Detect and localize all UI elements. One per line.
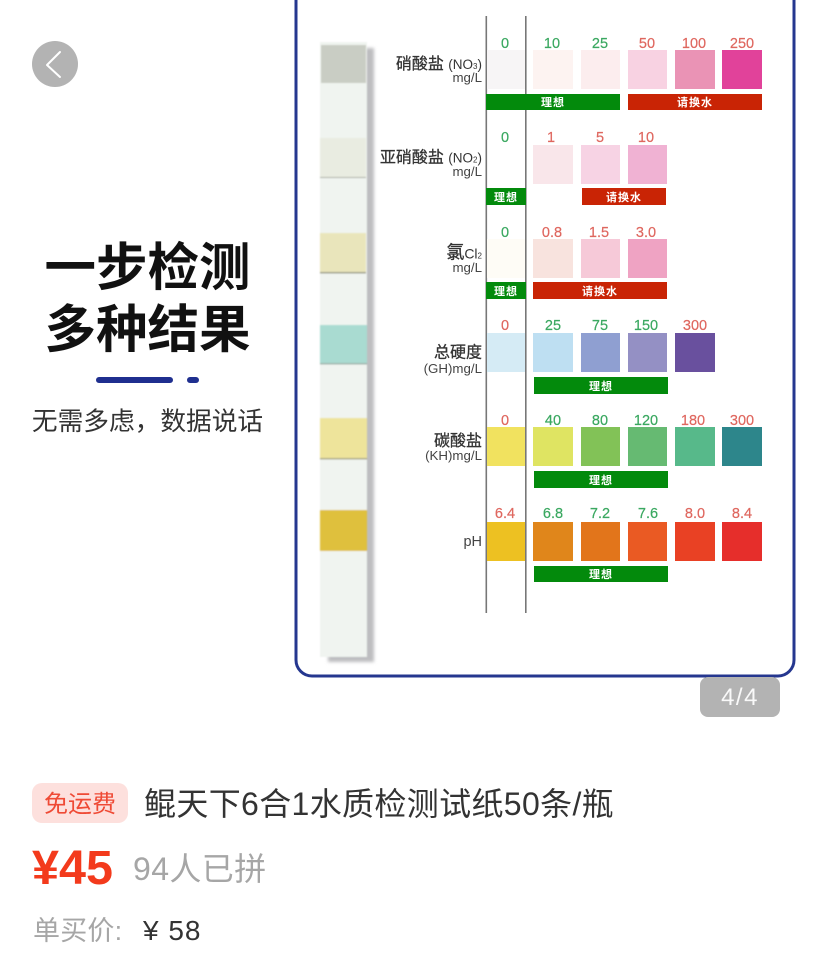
row: chlorine: mg/L [452,260,482,275]
row: pH [463,506,762,582]
single buy price: ¥ 58 [142,915,202,946]
free shipping tag [32,783,128,823]
chart scale lines [486,16,527,613]
row: nitrate: 理想 [541,95,565,109]
row: carbonate: 0 [501,413,509,429]
product title: 鲲天下6合1水质检测试纸50条/瓶 [144,786,614,822]
row: total hardness: 150 [634,318,658,334]
row: nitrite: 亚硝酸盐 (NO2) [380,148,482,166]
row: nitrite: mg/L [452,164,482,179]
row: nitrite: 10 [638,130,654,146]
row: carbonate: 碳酸盐 [434,432,482,450]
row: carbonate: 300 [730,413,754,429]
heading underline [96,377,199,383]
test strip [320,42,374,662]
row: chlorine: 3.0 [636,225,656,241]
row: nitrite [380,130,667,205]
row: pH: 6.8 [543,506,563,522]
heading: one-step test: 多种结果 [44,300,251,358]
row: nitrate: 10 [544,36,560,52]
pagination pill: 4/4 [721,684,759,711]
row: nitrate: 50 [639,36,655,52]
group price: ¥45 [32,841,113,895]
free shipping tag: 免运费 [44,791,116,818]
heading: one-step test [44,238,251,358]
row: chlorine: 请换水 [582,284,618,298]
row: total hardness [424,318,715,394]
row: chlorine: 氯Cl2 [446,242,483,262]
row: pH: 8.4 [732,506,752,522]
row: carbonate: 40 [545,413,561,429]
row: total hardness: 0 [501,318,509,334]
row: nitrate: 25 [592,36,608,52]
row: carbonate: 80 [592,413,608,429]
heading: one-step test: 一步检测 [44,238,251,296]
row: chlorine: 0.8 [542,225,562,241]
row: chlorine: 0 [501,225,509,241]
row: nitrate: 请换水 [677,95,713,109]
row: nitrate: mg/L [452,70,482,85]
row: nitrate: 100 [682,36,706,52]
row: nitrite: 1 [547,130,555,146]
row: total hardness: (GH)mg/L [424,361,482,376]
row: chlorine: 理想 [494,284,518,298]
row: nitrite: 0 [501,130,509,146]
row: carbonate: 180 [681,413,705,429]
row: nitrite: 5 [596,130,604,146]
row: nitrate: 0 [501,36,509,52]
row: total hardness: 理想 [589,379,613,393]
row: nitrate [396,36,762,110]
row: chlorine [446,225,667,299]
pagination pill [700,677,780,717]
icon: back button [32,41,78,87]
row: pH: pH [463,534,482,550]
row: nitrate: 硝酸盐 (NO3) [396,55,482,73]
row: nitrite: 请换水 [606,190,642,204]
row: pH: 理想 [589,567,613,581]
row: pH: 7.2 [590,506,610,522]
single buy label: 单买价: [33,916,122,946]
group count: 94人已拼 [133,851,267,887]
panel: test chart frame [296,0,794,676]
row: carbonate [425,413,762,488]
row: total hardness: 总硬度 [434,344,482,362]
row: pH: 7.6 [638,506,658,522]
row: pH: 8.0 [685,506,705,522]
row: total hardness: 300 [683,318,707,334]
row: chlorine: 1.5 [589,225,609,241]
row: total hardness: 75 [592,318,608,334]
subheading: 无需多虑，数据说话 [32,407,263,436]
row: carbonate: (KH)mg/L [425,448,482,463]
row: carbonate: 理想 [589,473,613,487]
row: total hardness: 25 [545,318,561,334]
row: pH: 6.4 [495,506,515,522]
row: carbonate: 120 [634,413,658,429]
row: nitrate: 250 [730,36,754,52]
row: nitrite: 理想 [494,190,518,204]
